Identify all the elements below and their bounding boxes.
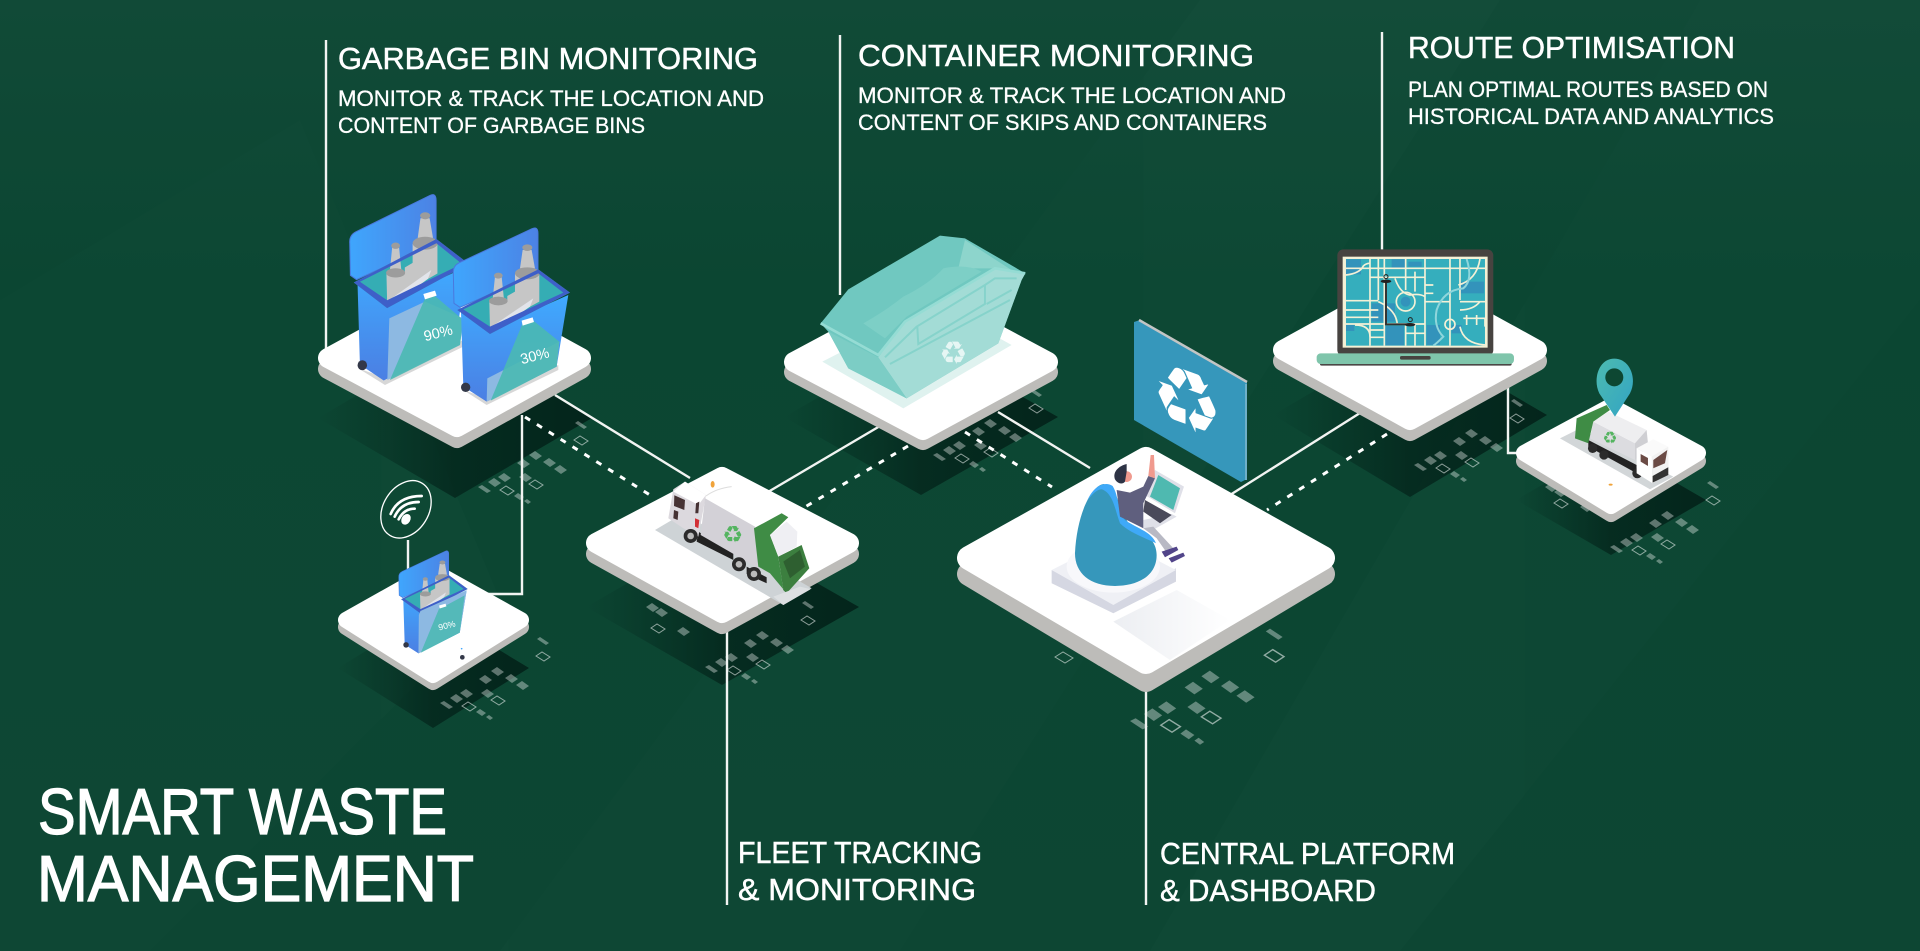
icon: garbage bin 90%: [350, 195, 469, 385]
icon: located truck with map pin: [1560, 359, 1673, 489]
icon: skip container: [821, 236, 1025, 408]
icon: skip container: ♻: [939, 336, 967, 372]
platform: garbage bins: [328, 289, 581, 438]
heading: garbage bin monitoring: CONTENT OF GARBAGE BINS: [338, 113, 645, 138]
heading: container monitoring: CONTENT OF SKIPS AND CONTAINERS: [858, 110, 1267, 135]
icon: person on beanbag with laptop: [1052, 455, 1230, 660]
heading: garbage bin monitoring: GARBAGE BIN MONITORING: [338, 41, 758, 76]
heading: container monitoring: MONITOR & TRACK THE LOCATION AND: [858, 83, 1286, 108]
leader lines to headings: [326, 32, 1382, 905]
heading: fleet tracking: [738, 835, 982, 907]
heading: container monitoring: [858, 38, 1286, 135]
title: [37, 775, 474, 915]
platform: fleet truck: [596, 477, 849, 624]
title: MANAGEMENT: [37, 842, 474, 915]
platform: sensor bin: [346, 571, 521, 682]
icon: laptop with route map: [1317, 249, 1514, 366]
icon: fleet garbage truck: [655, 481, 812, 605]
platform: route laptop: [1283, 280, 1537, 431]
heading: route optimisation: PLAN OPTIMAL ROUTES BASED ON: [1408, 77, 1768, 102]
platform shadows: [318, 335, 1706, 728]
heading: fleet tracking: & MONITORING: [738, 872, 976, 907]
heading: garbage bin monitoring: MONITOR & TRACK THE LOCATION AND: [338, 86, 764, 111]
icon: recycling sign: [1134, 320, 1247, 482]
decorative tile patterns: [440, 389, 1720, 745]
heading: route optimisation: ROUTE OPTIMISATION: [1408, 30, 1735, 65]
heading: route optimisation: HISTORICAL DATA AND ANALYTICS: [1408, 104, 1774, 129]
icon: small sensor bin: 90%: [437, 618, 457, 632]
connector lines: solid: [480, 375, 1522, 594]
icon: garbage bin 90%: 90%: [422, 322, 455, 345]
platform: located truck: [1524, 406, 1698, 514]
heading: container monitoring: CONTAINER MONITORING: [858, 38, 1254, 73]
platform: container: [794, 294, 1048, 440]
icon: small sensor bin: [399, 551, 468, 660]
icon: recycling sign: ♻: [1152, 339, 1222, 462]
heading: route optimisation: [1408, 30, 1774, 129]
heading: central platform: CENTRAL PLATFORM: [1160, 836, 1455, 871]
icon: wifi badge: [371, 471, 441, 547]
connector lines: dashed: [525, 417, 1387, 510]
heading: fleet tracking: FLEET TRACKING: [738, 835, 982, 870]
title: SMART WASTE: [38, 775, 447, 848]
icon: garbage bin 30%: 30%: [519, 345, 551, 368]
heading: central platform: & DASHBOARD: [1160, 873, 1376, 908]
icon: located truck with map pin: ♻: [1602, 428, 1617, 447]
icon: fleet garbage truck: ♻: [722, 521, 743, 549]
heading: central platform: [1160, 836, 1455, 908]
heading: garbage bin monitoring: [338, 41, 764, 138]
platform: central dashboard: [969, 459, 1323, 680]
icon: garbage bin 30%: [453, 228, 570, 405]
